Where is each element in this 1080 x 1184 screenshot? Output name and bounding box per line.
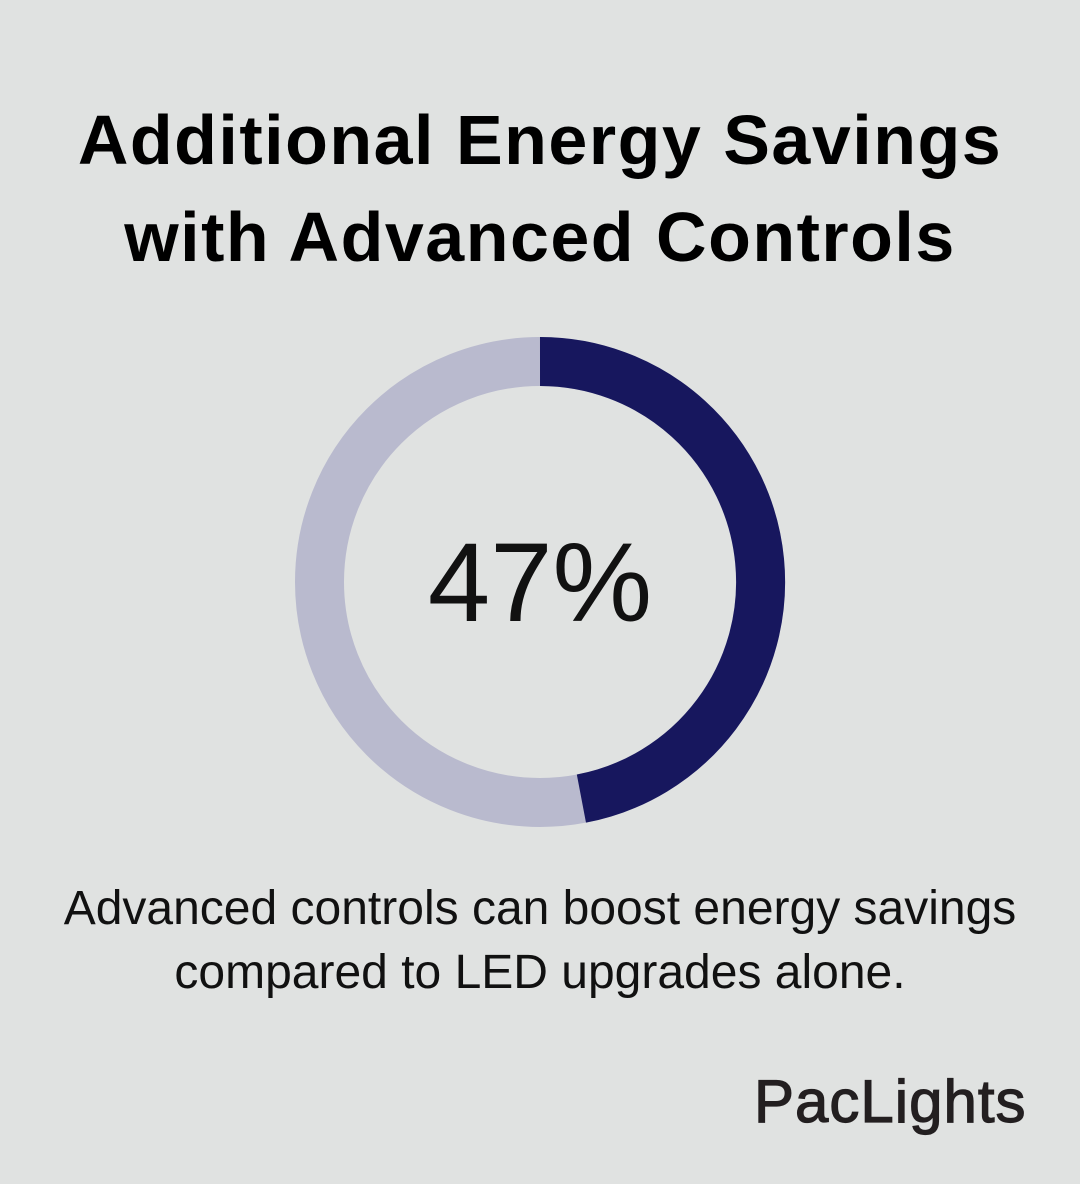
percentage value: 47% bbox=[428, 520, 652, 645]
caption: Advanced controls can boost energy savings bbox=[64, 882, 1016, 935]
caption bbox=[64, 882, 1016, 999]
title bbox=[78, 101, 1002, 276]
caption: compared to LED upgrades alone. bbox=[174, 946, 906, 999]
title: with Advanced Controls bbox=[124, 198, 956, 276]
title: Additional Energy Savings bbox=[78, 101, 1002, 179]
logo: PacLights bbox=[754, 1068, 1026, 1135]
